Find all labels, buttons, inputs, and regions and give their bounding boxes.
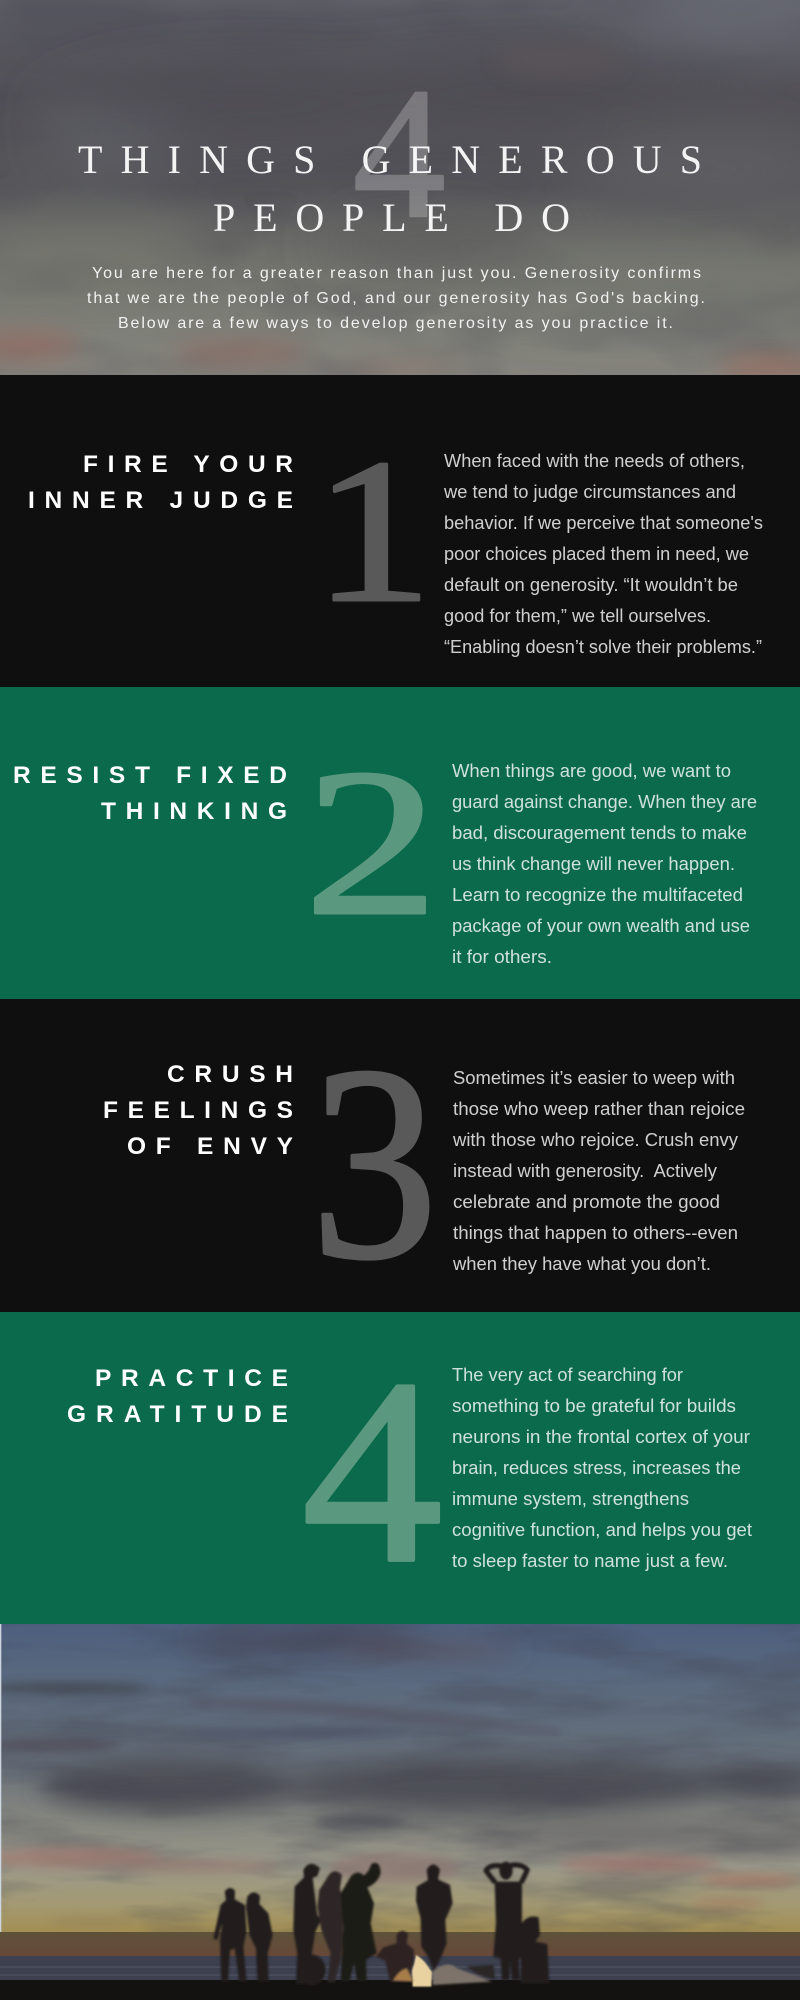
person D — [317, 1871, 343, 1983]
step 4 body text: brain, reduces stress, increases the — [452, 1458, 741, 1478]
step 2 heading: RESIST FIXED — [13, 762, 287, 789]
step 3 heading: FEELINGS — [103, 1097, 293, 1124]
step 3 body text: celebrate and promote the good — [453, 1192, 720, 1212]
step 2 heading — [13, 762, 287, 825]
person F — [416, 1864, 453, 1972]
step 4 body text: neurons in the frontal cortex of your — [452, 1427, 750, 1447]
person A — [213, 1888, 247, 1982]
hero sky photo background — [0, 0, 800, 380]
step 3 body text: with those who rejoice. Crush envy — [452, 1130, 738, 1150]
step 2 body text: Learn to recognize the multifaceted — [452, 885, 743, 905]
step 4 body text: immune system, strengthens — [452, 1489, 689, 1509]
title: THINGS GENEROUS — [78, 137, 702, 182]
step 4 heading: PRACTICE — [95, 1365, 288, 1392]
step 2 body text: us think change will never happen. — [452, 854, 735, 874]
step 2 body text — [452, 761, 757, 967]
step 3 heading: CRUSH — [167, 1061, 293, 1088]
intro paragraph: that we are the people of God, and our generosity has God's backing. — [87, 290, 705, 307]
step 4 heading: GRATITUDE — [67, 1401, 288, 1428]
step 1 heading: INNER JUDGE — [28, 487, 293, 514]
sunset sky — [0, 1624, 800, 1934]
step 3 body text: instead with generosity. Actively — [453, 1161, 717, 1181]
intro paragraph: Below are a few ways to develop generosity as you practice it. — [118, 315, 673, 332]
title — [78, 137, 702, 240]
person G backpack — [521, 1916, 549, 1983]
panel: step 2 resist fixed thinking — [0, 687, 800, 999]
person C — [293, 1864, 321, 1984]
step 2 body text: bad, discouragement tends to make — [452, 823, 747, 843]
person G — [486, 1862, 527, 1980]
panel: step 3 crush feelings of envy — [0, 999, 800, 1317]
intro paragraph: You are here for a greater reason than just you. Generosity confirms — [92, 265, 701, 282]
step 1 body text: When faced with the needs of others, — [444, 451, 745, 471]
step 1 heading: FIRE YOUR — [83, 451, 293, 478]
step 3 body text: things that happen to others--even — [453, 1223, 738, 1243]
step 3 body text: those who weep rather than rejoice — [453, 1099, 745, 1119]
step 3 heading — [103, 1061, 293, 1160]
step 3 body text: Sometimes it’s easier to weep with — [453, 1068, 735, 1088]
step 4 body text — [452, 1365, 752, 1571]
step 3 heading: OF ENVY — [127, 1133, 293, 1160]
panel: step 1 fire your inner judge — [0, 375, 800, 687]
step 1 heading — [28, 451, 293, 514]
blanket — [433, 1965, 492, 1985]
step 4 body text: cognitive function, and helps you get — [452, 1520, 752, 1540]
step 2 body text: package of your own wealth and use — [452, 916, 750, 936]
panel: step 4 practice gratitude — [0, 1312, 800, 1624]
step 3 body text: when they have what you don’t. — [452, 1254, 711, 1274]
step 1 body text: default on generosity. “It wouldn’t be — [444, 575, 738, 595]
step 4 heading — [67, 1365, 288, 1428]
step 1 body text: we tend to judge circumstances and — [443, 482, 736, 502]
silhouettes of people around campfire — [213, 1862, 549, 1987]
step 1 body text: good for them,” we tell ourselves. — [444, 606, 711, 626]
step 4 body text: something to be grateful for builds — [452, 1396, 736, 1416]
step 4 body text: to sleep faster to name just a few. — [452, 1551, 728, 1571]
person E — [341, 1863, 381, 1982]
seated person — [376, 1931, 414, 1982]
step 1 body text — [443, 451, 763, 657]
big faint numeral 4: 4 — [353, 50, 445, 257]
intro paragraph — [87, 265, 705, 332]
firelight on seated person — [393, 1968, 413, 1982]
panel: sunset photo with silhouettes — [0, 1624, 800, 2000]
step 1 numeral: 1 — [313, 418, 433, 645]
left edge highlight — [0, 1624, 1, 1932]
title: PEOPLE DO — [213, 195, 570, 240]
step 1 body text: “Enabling doesn’t solve their problems.” — [444, 637, 762, 657]
step 4 numeral: 4 — [302, 1325, 443, 1617]
panel: hero header — [0, 0, 800, 380]
campfire flame — [412, 1955, 432, 1987]
step 3 body text — [452, 1068, 745, 1274]
step 1 body text: poor choices placed them in need, we — [444, 544, 749, 564]
backpack on ground — [298, 1955, 326, 1985]
step 2 body text: guard against change. When they are — [452, 792, 757, 812]
step 2 body text: it for others. — [452, 947, 552, 967]
step 4 body text: The very act of searching for — [452, 1365, 683, 1385]
person B — [246, 1892, 273, 1982]
step 2 body text: When things are good, we want to — [452, 761, 731, 781]
step 2 numeral: 2 — [304, 726, 439, 959]
step 1 body text: behavior. If we perceive that someone's — [444, 513, 763, 533]
sea and horizon band — [0, 1932, 800, 1980]
step 2 heading: THINKING — [101, 798, 287, 825]
step 3 numeral: 3 — [311, 1011, 438, 1317]
